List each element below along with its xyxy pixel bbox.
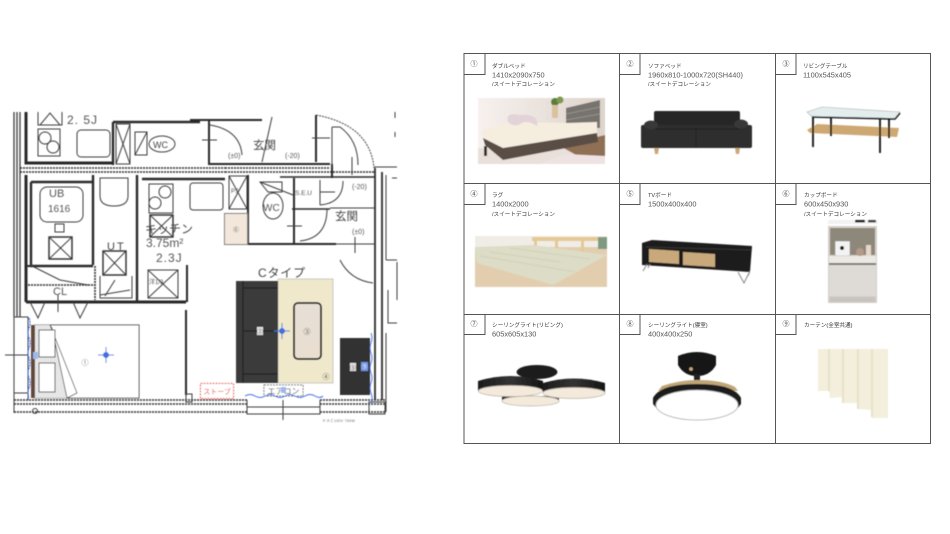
plan: room labels: 洋1/3	[149, 278, 164, 286]
cell 2 text: 1960x810-1000x720(SH440)	[648, 70, 743, 80]
plan: heater: ストーブ	[203, 387, 231, 396]
number labels: ④	[470, 190, 478, 198]
plan: double bed: ①	[82, 359, 88, 367]
plan: air conditioner: エアコン	[268, 387, 300, 396]
plan: double bed	[31, 325, 139, 398]
number labels: ②	[626, 60, 634, 68]
cell 7 text	[492, 321, 563, 338]
plan: room labels: ⑥	[233, 226, 239, 234]
cell 7 text: 605x605x130	[492, 330, 536, 338]
product: TV board photo	[642, 240, 752, 283]
plan: room labels: WC	[153, 140, 168, 150]
product: rug photo	[475, 236, 607, 287]
furniture table	[464, 53, 930, 444]
number labels: ⑧	[626, 320, 634, 328]
plan: curtains and lights in blue	[28, 318, 372, 403]
cell 1 text: ダブルベッド	[492, 62, 526, 70]
cell 6 text	[804, 191, 867, 218]
cell 4 text: /スイートデコレーション	[492, 210, 555, 218]
product: living ceiling light photo	[478, 365, 605, 406]
cell 1 text	[492, 62, 555, 88]
cell 8 text: シーリングライト(寝室)	[648, 321, 708, 329]
cell 3 text	[803, 62, 851, 80]
cell 6 text: 600x450x930	[804, 200, 848, 208]
cell 1 text: 1410x2090x750	[492, 70, 545, 80]
plan: room labels: UT	[107, 241, 126, 253]
plan: table: ③	[304, 328, 310, 336]
cell 1 text: /スイートデコレーション	[492, 80, 555, 88]
product: sofa photo	[641, 111, 752, 154]
plan: sofa: ②	[257, 328, 263, 336]
plan: room labels: (-20)	[285, 153, 300, 160]
cell 8 text	[648, 321, 708, 338]
number labels: ⑥	[782, 190, 790, 198]
plan: room labels: 2. 5J	[67, 113, 98, 127]
plan: TV board: ⑤	[350, 364, 356, 372]
plan: bottom exterior wall	[5, 317, 386, 420]
cell 2 text: /スイートデコレーション	[648, 80, 711, 88]
plan: TV board	[340, 338, 370, 395]
cell 3 text: リビングテーブル	[803, 62, 848, 70]
cell 4 text: 1400x2000	[492, 200, 529, 208]
plan: room labels: Cタイプ	[258, 266, 306, 280]
cell 9 text: カーテン(全室共通)	[804, 321, 853, 329]
number labels: ⑨	[782, 320, 790, 328]
plan: room labels: PS	[231, 189, 239, 195]
plan: sofa	[236, 281, 278, 383]
plan: room labels: 2.3J	[156, 251, 183, 265]
number labels: ③	[782, 60, 790, 68]
plan: room labels: UB	[49, 188, 64, 200]
product: cupboard photo	[828, 220, 878, 303]
cell 6 text: カップボード	[804, 191, 838, 199]
plan: rug number: ④	[322, 373, 330, 381]
cell 4 text: ラグ	[492, 191, 504, 199]
plan: entrance and toilet area	[190, 112, 397, 400]
number labels	[470, 60, 790, 328]
number labels: ⑤	[626, 190, 634, 198]
plan: room labels: 1616	[48, 204, 71, 215]
number boxes	[464, 53, 796, 334]
plan: room labels: CL	[53, 286, 67, 298]
plan: heater	[200, 384, 234, 398]
number labels: ①	[470, 60, 478, 68]
plan: room labels	[48, 113, 367, 298]
table grid	[464, 53, 930, 444]
product: living table photo	[807, 107, 900, 153]
cell 3 text: 1100x545x405	[803, 70, 851, 80]
plan: room labels: S.E.U	[295, 190, 312, 197]
cell 4 text	[492, 191, 555, 218]
number labels: ⑦	[470, 320, 478, 328]
product: curtain photo	[818, 349, 888, 418]
cell 2 text	[648, 63, 743, 88]
cell 2 text: ソファベッド	[648, 63, 682, 70]
plan: table	[294, 303, 321, 359]
plan: room labels: キッチン	[145, 222, 193, 236]
cell 7 text: シーリングライト(リビング)	[492, 321, 563, 329]
cell 5 text: TVボード	[648, 191, 672, 199]
plan: room labels: (±0)	[352, 229, 364, 236]
plan: rug	[278, 279, 333, 383]
plan: room labels: 玄関	[335, 210, 358, 223]
plan: room labels: 3.75m²	[146, 236, 183, 250]
plan: room labels: WC	[263, 203, 280, 214]
plan: room labels: (-20)	[352, 184, 367, 191]
plan: small note: P.ＡＣ100V 750W	[323, 419, 355, 423]
cell 5 text: 1500x400x400	[648, 200, 696, 208]
cell 6 text: /スイートデコレーション	[804, 210, 867, 218]
product: double bed photo	[478, 96, 605, 164]
product: bedroom ceiling light photo	[653, 352, 741, 420]
floor plan	[5, 112, 397, 423]
plan: structural walls and fixtures	[14, 112, 375, 395]
cell 8 text: 400x400x250	[648, 330, 692, 338]
plan: air conditioner	[264, 385, 303, 396]
plan: room labels: (±0)	[228, 153, 240, 160]
plan: TV board: ⑨	[361, 363, 368, 371]
plan: room labels: 玄関	[253, 139, 276, 152]
cell 5 text	[648, 191, 696, 208]
